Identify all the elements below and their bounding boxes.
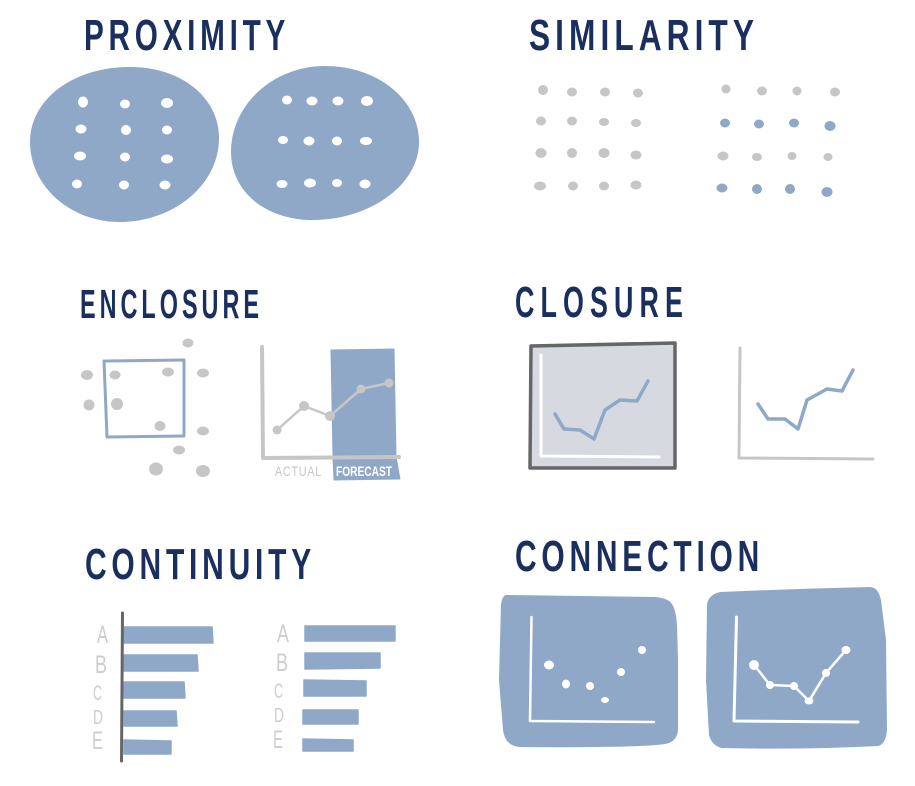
bar chart with axis: B	[95, 651, 107, 679]
chart: open frame	[739, 348, 873, 459]
bar chart with axis	[92, 613, 213, 761]
panel: continuity	[85, 540, 395, 761]
line series	[272, 378, 394, 434]
dot grid: alternating blue rows	[716, 84, 840, 197]
heading: similarity: SIMILARITY	[529, 11, 759, 60]
chart: closed frame	[530, 343, 675, 468]
forecast band	[331, 349, 400, 480]
panel: connection	[499, 532, 887, 749]
heading: enclosure: ENCLOSURE	[80, 281, 263, 327]
bar chart with axis: E	[92, 727, 103, 755]
bar chart with axis: C	[93, 682, 102, 705]
dot grid: all grey	[534, 85, 643, 190]
axes	[262, 347, 399, 458]
bar chart with axis: A	[97, 621, 108, 649]
label: forecast: FORECAST	[336, 463, 392, 479]
panel: proximity	[30, 11, 419, 222]
heading: connection: CONNECTION	[515, 532, 764, 581]
bar chart without axis: C	[274, 680, 283, 703]
bar chart with axis: D	[93, 707, 103, 729]
chart: actual vs forecast	[262, 347, 400, 480]
bar chart without axis	[273, 620, 395, 754]
heading: continuity: CONTINUITY	[85, 540, 316, 589]
panel: enclosure	[80, 281, 400, 480]
bar chart without axis: B	[276, 649, 288, 677]
enclosure square with dots	[81, 338, 210, 477]
heading: closure: CLOSURE	[515, 278, 689, 327]
label: actual: ACTUAL	[275, 463, 322, 479]
heading: proximity: PROXIMITY	[84, 11, 290, 60]
bar chart without axis: A	[277, 620, 289, 648]
panel: similarity	[529, 11, 840, 197]
chart: unconnected points	[499, 595, 678, 747]
panel: closure	[515, 278, 873, 468]
bar chart without axis: D	[274, 705, 284, 727]
chart: connected points	[706, 587, 887, 749]
blob: grouped in columns	[30, 67, 219, 222]
bar chart without axis: E	[273, 726, 283, 754]
blob: grouped in rows	[231, 66, 419, 220]
